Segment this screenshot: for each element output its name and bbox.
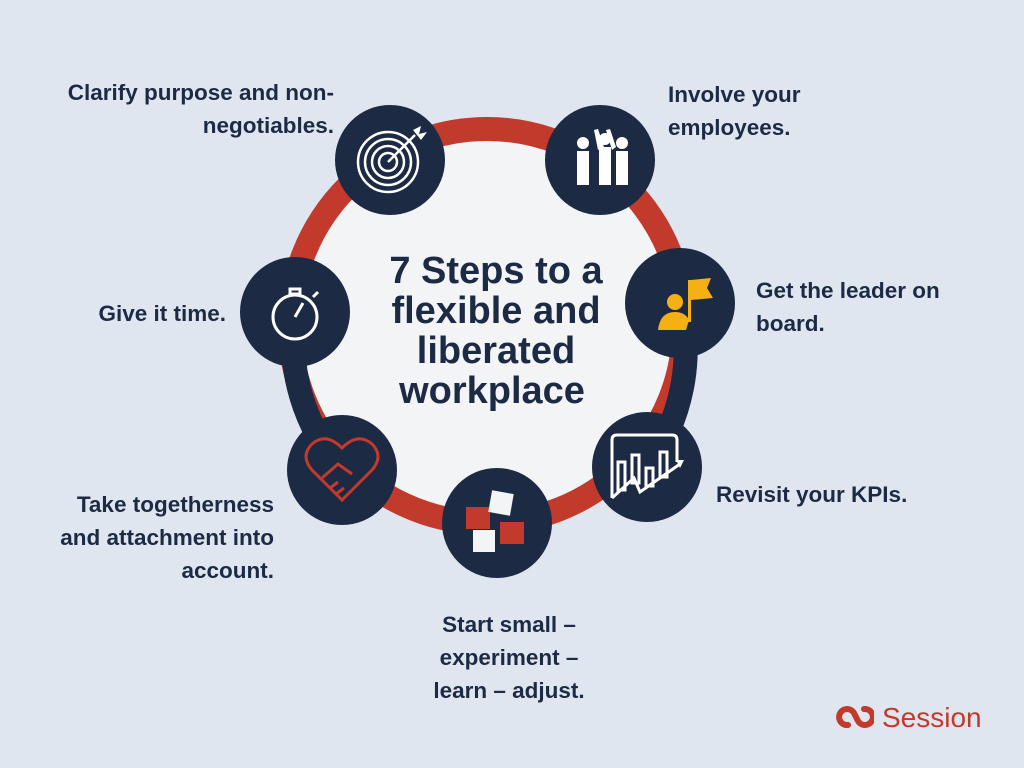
label step 5: learn – adjust. [433, 678, 585, 703]
title: workplace [398, 370, 585, 412]
icon: target [335, 105, 445, 215]
ring [290, 129, 686, 523]
label step 6: account. [181, 558, 274, 583]
label step 6: Take togetherness [77, 492, 274, 517]
label step 2: employees. [668, 115, 791, 140]
label step 3 [756, 278, 940, 336]
label step 3: Get the leader on [756, 278, 940, 303]
label step 6: and attachment into [60, 525, 274, 550]
icon: KPI chart [592, 412, 702, 522]
icon: leader flag [625, 248, 735, 358]
title [389, 250, 604, 412]
label step 1: Clarify purpose and non- [68, 80, 334, 105]
label step 4: Revisit your KPIs. [716, 482, 907, 507]
icon: people [545, 105, 655, 215]
icon: handshake heart [287, 415, 397, 525]
label step 1 [68, 80, 334, 138]
label step 5 [433, 612, 585, 703]
title: liberated [417, 330, 575, 372]
logo [836, 702, 982, 733]
label step 5: Start small – [442, 612, 576, 637]
label step 7: Give it time. [98, 301, 226, 326]
label step 2 [668, 82, 801, 140]
label step 3: board. [756, 311, 825, 336]
label step 1: negotiables. [203, 113, 334, 138]
title: 7 Steps to a [389, 250, 604, 292]
label step 2: Involve your [668, 82, 801, 107]
icon: stopwatch [240, 257, 350, 367]
label step 5: experiment – [440, 645, 578, 670]
icon: puzzle [442, 468, 552, 578]
logo: Session [882, 702, 982, 733]
label step 6 [60, 492, 274, 583]
title: flexible and [391, 290, 601, 332]
